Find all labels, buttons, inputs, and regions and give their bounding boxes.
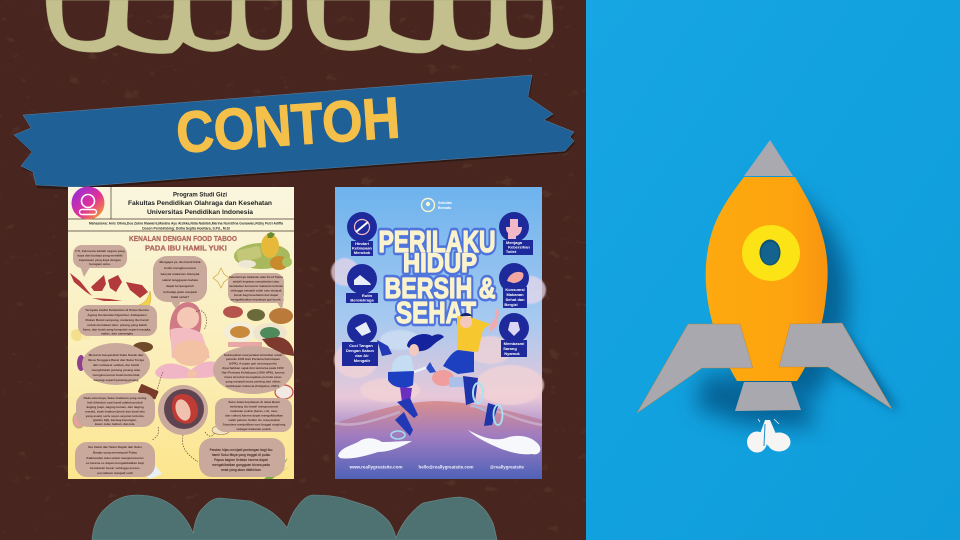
item: wash hands	[342, 314, 378, 366]
item: toilet: Menjaga	[506, 240, 523, 245]
icon: eggplant	[77, 355, 85, 371]
bubble: Dayak and Banjar: Ibu hamil dari Suku Dayak dan Suku	[88, 445, 142, 449]
bubble: common foods: Pada umumnya, Suku makanan yang sering	[84, 396, 147, 400]
item: mosquito nests	[499, 313, 529, 357]
bubble: question: sakral tanggapan bahwa	[162, 278, 198, 282]
item: wash hands: Mengalir	[354, 358, 371, 363]
illustration: girl jumping	[377, 334, 444, 439]
bubble: Suku Jawa: melarang ibu hamil mengonsumsi	[230, 404, 278, 408]
bubble: pandan: mengakibatkan gangguan bicara pada	[212, 463, 270, 467]
bubble: Suku Jawa: makanan pokok (beras, roti, nasi,	[230, 409, 278, 413]
title outline layer: Perilaku Hidup Bersih dan Sehat	[378, 224, 496, 330]
bubble: Suku Jawa: Sumatera menjadikan nasi tinggal singkong	[223, 422, 286, 426]
bubble: Suku Jawa: sebagai makanan pokok.	[236, 427, 272, 431]
bubble: Dayak and Banjar: Banjar yang menempati Pulau	[93, 450, 137, 454]
bubble: Dayak and Banjar: berukuran besar sehingga proses	[90, 466, 140, 470]
icon: sago plate	[212, 426, 230, 434]
bubble: Suku Jawa	[215, 398, 292, 432]
bubble: pandan: hamil Suku Maya yang tinggal di pulau	[212, 453, 270, 457]
bubble: Suku Jawa: salah paham. Selain itu, masyarakat	[228, 418, 280, 422]
item: healthy food: Konsumsi	[505, 287, 525, 292]
clouds in sky	[331, 258, 546, 405]
bubble: Sumba tradition: nakas, dan semangka	[101, 332, 133, 336]
illustration: white clouds	[338, 430, 540, 459]
bubble: Sasak and Toraja: bayang seperti jantung pisang	[94, 378, 138, 382]
poster header: Mahasiswa: Anis Olivia,Dea Zahra Mawarni,Maraha Ayu Alzikka,Nida Nabilah,Marina Nurrafina Gunawan,Rizky Putri Adiffa	[89, 222, 283, 226]
bubble: 1000 HPK	[213, 346, 293, 394]
item: wash hands: dan Air	[355, 353, 369, 358]
icon: pandan leaves	[264, 458, 291, 479]
bubble: pandan: Papua bagian Selatan karena dapat	[214, 458, 269, 462]
bubble: common foods	[76, 393, 155, 427]
rocket shadow	[695, 180, 900, 428]
title: Perilaku Hidup Bersih dan Sehat	[378, 224, 496, 330]
bubble: Dayak and Banjar: Kalimantan tabu untuk mengkonsumsi	[87, 456, 144, 460]
poster header: Universitas Pendidikan Indonesia	[147, 210, 254, 216]
item: healthy food: Makanan	[506, 292, 524, 297]
poster header	[68, 187, 294, 231]
item: toilet	[499, 212, 533, 255]
bubble: intro: kepulauan yang kaya dengan	[79, 258, 121, 262]
rocket nose cone	[744, 140, 793, 176]
icon: beef	[138, 384, 159, 400]
item: mosquito nests: Membasmi	[504, 341, 524, 346]
winding road	[335, 406, 542, 425]
icon: yellow fruit	[71, 329, 91, 341]
illustration: pregnancy test	[228, 342, 262, 347]
bubble: Sumba tradition: Ternyata tradisi Kehamilan di Pulau Sumba	[85, 308, 149, 312]
item: no smoking	[347, 212, 377, 256]
panel: blue paper background	[586, 0, 960, 540]
icon: sate	[133, 342, 153, 352]
item: wash hands: Dengan Sabun	[346, 348, 375, 353]
illustration: pregnant woman	[155, 302, 222, 379]
bubble: question: banyak makanan. Dampak	[161, 272, 200, 276]
illustration: fetus in womb	[158, 385, 208, 435]
bubble: intro: FYI, Indonesia adalah negara yang	[75, 249, 125, 253]
poster header: Program Studi Gizi	[173, 192, 227, 198]
bubble: 1000 HPK: Hari Pertama Kehidupan (1000 HPK), karena	[222, 370, 285, 374]
title outline layer: Perilaku Hidup Bersih dan Sehat: BERSIH &	[384, 273, 496, 305]
illustration: boy jumping	[432, 308, 502, 426]
bubble: Sumba tradition	[78, 305, 157, 336]
contact details: @reallygreatsite	[490, 464, 525, 470]
item: exercise: Rutin	[362, 293, 373, 298]
item: healthy food: Bergizi	[504, 302, 518, 307]
icon: profile badge	[72, 186, 104, 220]
bubble: 1000 HPK: yang menjadi masa penting dari siklus	[225, 380, 281, 384]
poster heading: PADA IBU HAMIL YUK!	[145, 244, 227, 252]
title outline layer: Perilaku Hidup Bersih dan Sehat: HIDUP	[403, 248, 477, 278]
rocket body	[706, 177, 828, 381]
bubble: definition: mengakibatkan terjadinya gizi buruk.	[231, 298, 282, 302]
poster heading: KENALAN DENGAN FOOD TABOO	[129, 234, 237, 243]
decoration: khaki paper loops right group	[307, 0, 553, 53]
icon: rice bowl	[275, 385, 293, 399]
bubble: definition: sehingga menjadi salah satu dampak	[230, 288, 282, 292]
poster heading	[129, 234, 237, 252]
decoration: teal scalloped paper	[92, 495, 497, 540]
bubble: Sumba tradition: Agung Kecamatan Ngombur, Kabupaten	[87, 313, 147, 317]
rocket nozzle	[735, 382, 801, 411]
bubble: common foods: kuaci, telur, kelinci, dan lele.	[95, 422, 135, 426]
bubble: intro: kaya dari budaya yang memiliki	[77, 254, 123, 258]
bubble: definition: Sebelumnya makanan atau Food Taboo	[229, 275, 283, 279]
bubble: intro	[73, 245, 127, 277]
decoration: khaki paper loops	[46, 0, 292, 54]
item: no smoking: Merokok	[354, 250, 371, 255]
rocket window	[742, 225, 800, 281]
bubble: Dayak and Banjar: es karena es dapat mengakibatkan bayi	[86, 461, 144, 465]
bubble: question: terhadap janin menjadi	[163, 290, 197, 294]
bubble: Dayak and Banjar	[75, 442, 155, 477]
connector paths	[152, 311, 216, 462]
rocket exhaust smoke	[747, 419, 790, 452]
item: healthy food	[499, 263, 529, 308]
poster: food taboo	[68, 186, 294, 479]
bubble: definition: buruk bagi kesehatan dan dapat	[234, 293, 278, 297]
bubble: common foods: kali dihindari saat hamil adalah produk	[87, 400, 143, 404]
illustration: paper rocket	[637, 140, 900, 452]
logo: sekolah: Bersatu	[438, 206, 451, 210]
item: mosquito nests: Sarang	[503, 346, 517, 351]
bubble: common foods: daging (sapi, daging kuman, dan daging	[86, 405, 144, 409]
rocket right fin	[779, 323, 892, 409]
bubble: question	[153, 256, 207, 309]
bubble: Sasak and Toraja: dari sulawesi selatan, ibu hamil	[93, 363, 139, 367]
title: Perilaku Hidup Bersih dan Sehat: SEHAT	[396, 295, 476, 330]
panel: brown textured background	[0, 0, 586, 540]
title: Perilaku Hidup Bersih dan Sehat: HIDUP	[403, 248, 477, 278]
item: mosquito nests: Nyamuk	[504, 351, 521, 356]
bubble: Sasak and Toraja: Menurut masyarakat Suku Sasak dari	[89, 353, 144, 357]
icon: ice cubes	[140, 461, 162, 479]
bubble: pandan	[199, 438, 285, 477]
item: toilet: Toilet	[506, 249, 517, 254]
contact details: hello@reallygreatsite.com	[418, 464, 474, 470]
contact details: www.reallygreatsite.com	[348, 464, 403, 470]
poster header: Fakultas Pendidikan Olahraga dan Kesehatan	[128, 201, 272, 207]
bubble: definition	[228, 273, 284, 310]
bubble: intro: beragam suku.	[89, 262, 111, 266]
rocket left fin	[637, 324, 753, 413]
item: healthy food: Sehat dan	[505, 297, 525, 302]
title outline layer: Perilaku Hidup Bersih dan Sehat: PERILAKU	[378, 224, 496, 259]
purple hill	[335, 401, 542, 479]
item: wash hands: Cuci Tangan	[349, 343, 373, 348]
bubble: Sasak and Toraja: Nusa Tenggara Barat dan Suku Toraja	[88, 358, 144, 362]
bubble: definition: membatasi konsumsi makanan tertentu	[229, 284, 283, 288]
poster: perilaku hidup bersih dan sehat	[331, 187, 546, 479]
bubble: common foods: (jambu biji), kacang-kacangan,	[93, 418, 137, 422]
bubble: Sumba tradition: Rokan Barat Lampung, melarang ibu hamil	[86, 318, 149, 322]
illustration: hand	[262, 337, 294, 356]
banner: blue torn ribbon with title	[14, 75, 575, 190]
bubble: Sumba tradition: kena, dan buah yang bergetah seperti nangka,	[83, 328, 151, 332]
item: exercise: Berolahraga	[350, 298, 374, 302]
icon: guava	[73, 412, 85, 428]
illustration: taboo foods	[223, 306, 293, 343]
item: no smoking: Hindari	[355, 241, 369, 246]
logo: sekolah	[422, 198, 452, 212]
bubble: Sumba tradition: untuk memakan telur, pisang yang kalah	[87, 323, 147, 327]
map: Indonesia	[70, 273, 148, 301]
bubble: pandan: anak yang akan dilahirkan	[221, 468, 261, 472]
illustration: tropical fruit	[234, 232, 292, 270]
bubble: question: tidak sehat?	[171, 295, 189, 299]
title: CONTOH: CONTOH	[174, 85, 402, 166]
bubble: question: boleh mengkonsumsi	[164, 266, 196, 270]
bubble: pandan: Pandan hijau menjadi pantangan bagi ibu	[210, 448, 272, 452]
bubble: 1000 HPK: Kebanyakan masyarakat terlambat untuk	[224, 353, 283, 357]
item: no smoking: Kebiasaan	[352, 246, 373, 250]
bubble: 1000 HPK: masa tersebut merupakan periode emas	[224, 375, 282, 379]
poster header: Dosen Pembimbing: Dellia Septia Hoeltara, S.Pd., M.Si	[142, 226, 230, 230]
bubble: 1000 HPK: kehidupan manusia (Fatigatsu, 2021).	[226, 384, 280, 388]
item: toilet: Kebersihan	[508, 244, 530, 250]
illustration: sparkle stars	[213, 268, 229, 288]
bubble: Sasak and Toraja: menghindari jantung pisang atau	[92, 368, 140, 372]
bubble: Suku Jawa: dan sukun) karena dapat mengakibatkan	[225, 414, 283, 418]
bubble: question: Mengapa ya, ibu hamil tidak	[159, 260, 201, 264]
bubble: 1000 HPK: (HPK). Asupan gizi seorang perlu	[229, 362, 277, 366]
icon: bananas	[132, 291, 151, 313]
bubble: Sasak and Toraja: mengkonsumsi buah berbentuk	[93, 373, 140, 377]
logo: sekolah: Sekolah	[438, 201, 452, 205]
title outline layer: Perilaku Hidup Bersih dan Sehat: SEHAT	[396, 295, 476, 330]
item: exercise	[346, 264, 378, 303]
bubble: common foods: merah), buah-buahan (jeruk dan buah lain	[85, 410, 145, 414]
title: Perilaku Hidup Bersih dan Sehat: BERSIH &	[384, 273, 496, 305]
bubble: 1000 HPK: periode 1000 Hari Pertama Kehidupan	[226, 357, 280, 361]
contact details	[348, 464, 525, 470]
title: Perilaku Hidup Bersih dan Sehat: PERILAKU	[378, 224, 496, 259]
bubble: Suku Jawa: Suku Jawa kepulauan di Jawa Barat	[228, 400, 280, 404]
bubble: Sasak and Toraja	[82, 343, 150, 385]
bubble: common foods: yang asam) serta sayur-sayuran tertentu,	[86, 414, 145, 418]
bubble: definition: adalah kegiatan menghindari atau	[233, 280, 280, 284]
bubble: 1000 HPK: diperhatikan sejak dini terutama pada 1000	[222, 366, 284, 370]
bubble: question: dapat berpengaruh	[166, 284, 194, 288]
bubble: Dayak and Banjar: persalinan menjadi sulit	[97, 471, 133, 475]
